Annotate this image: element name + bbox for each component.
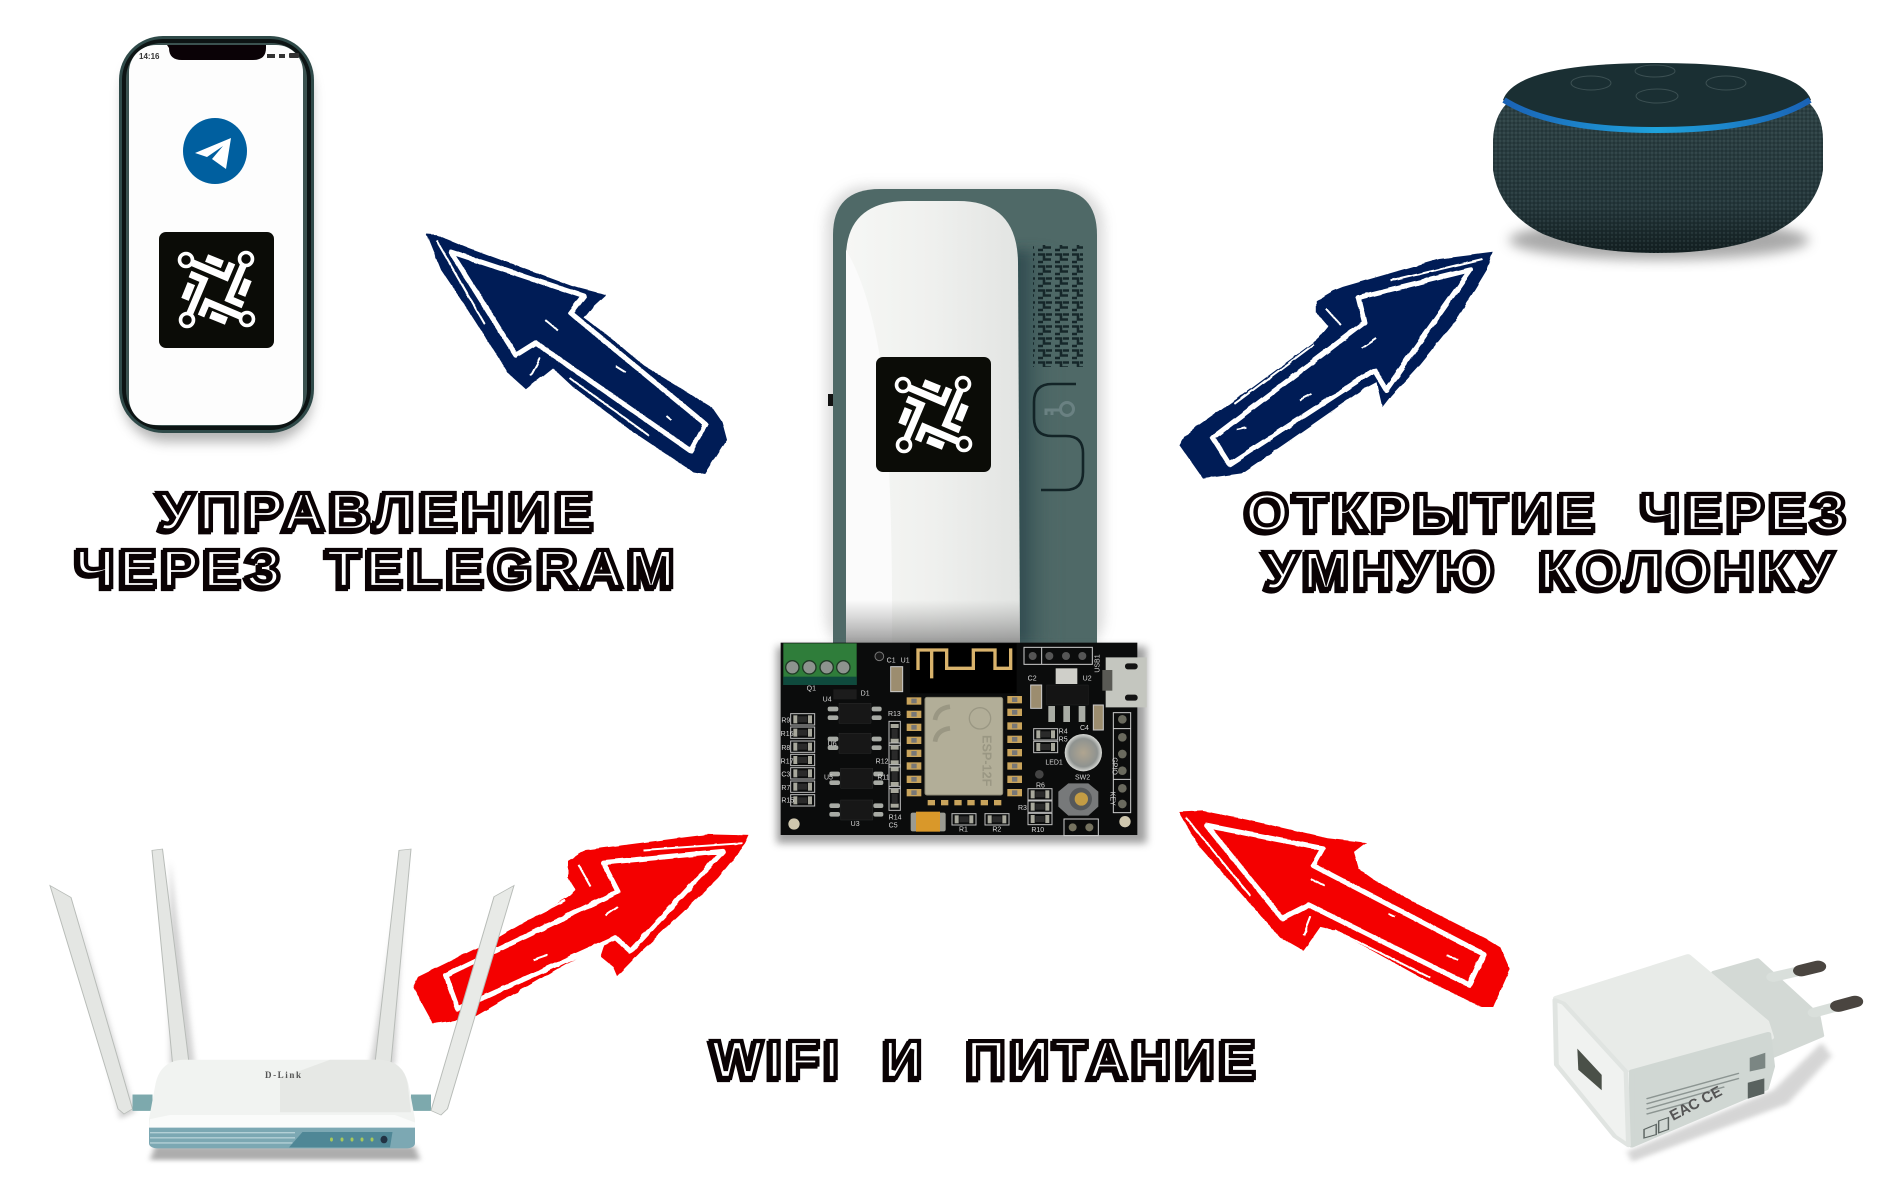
router brand label: D-Link — [265, 1070, 301, 1080]
USB header — [1024, 647, 1092, 664]
screw terminal — [783, 643, 857, 685]
ESP-12F module: ESP-12F — [980, 735, 994, 787]
speaker fabric body — [1493, 98, 1823, 253]
silkscreen labels: D1 — [861, 690, 870, 697]
GPIO header — [1113, 713, 1131, 813]
router base band — [149, 1128, 415, 1148]
voltage regulator — [1047, 668, 1088, 722]
silkscreen labels: U4 — [823, 697, 832, 704]
arrow: bottom-right red — [1179, 811, 1510, 1007]
silkscreen labels: R7 — [781, 785, 790, 792]
charger fine print — [1646, 1073, 1739, 1114]
silkscreen labels: SW2 — [1075, 774, 1090, 781]
capacitors — [891, 667, 1103, 730]
silkscreen labels: U5 — [824, 774, 833, 781]
antenna far right — [431, 885, 514, 1115]
intercom white receiver — [846, 201, 1020, 645]
phone app logo — [159, 232, 274, 348]
push button — [1058, 783, 1098, 816]
silkscreen labels: C5 — [889, 822, 898, 829]
charger side face — [1632, 1034, 1772, 1146]
speaker light ring — [1504, 100, 1810, 130]
antenna inner right — [375, 849, 411, 1063]
icon: key — [1046, 402, 1074, 416]
USB port — [1577, 1049, 1602, 1090]
silkscreen labels: C2 — [1028, 676, 1037, 683]
charger neck — [1714, 960, 1822, 1056]
router — [50, 849, 514, 1160]
tantalum capacitor — [911, 812, 946, 832]
speaker buttons — [1571, 65, 1746, 103]
silkscreen labels: GPIO — [1111, 757, 1118, 775]
silkscreen labels: R8 — [781, 745, 790, 752]
silkscreen labels: KEY — [1109, 792, 1116, 806]
charger certification marks: EAC CE — [1667, 1083, 1725, 1125]
silkscreen labels: R11 — [877, 774, 890, 781]
silkscreen labels: R3 — [1018, 805, 1027, 812]
heading: smart speaker opening — [1245, 483, 1851, 601]
router side connectors — [132, 1095, 431, 1111]
status LED — [1065, 734, 1102, 771]
QR code — [1748, 1078, 1764, 1099]
silkscreen labels: R16 — [781, 731, 794, 738]
silkscreen labels: U3 — [851, 821, 860, 828]
silkscreen labels: R6 — [1036, 783, 1045, 790]
silkscreen labels: U6 — [828, 741, 837, 748]
heading: smart speaker opening: УМНУЮ КОЛОНКУ — [1264, 541, 1838, 601]
arrow: top-left navy — [427, 234, 727, 474]
silkscreen labels: R9 — [781, 718, 790, 725]
antenna far left — [50, 885, 132, 1114]
board — [781, 643, 1137, 835]
silkscreen labels: R10 — [1031, 827, 1044, 834]
silkscreen labels: R1 — [959, 826, 968, 833]
charger top face — [1556, 957, 1771, 1070]
silkscreen labels: R5 — [1059, 736, 1068, 743]
charger front face — [1555, 1000, 1628, 1146]
router front panel — [289, 1132, 392, 1147]
antenna trace — [910, 643, 1017, 693]
phone status time: 14:16 — [139, 52, 160, 61]
phone notch — [167, 45, 266, 60]
resistor column middle — [889, 721, 900, 810]
intercom handset — [826, 186, 1104, 656]
heading: smart speaker opening: ОТКРЫТИЕ ЧЕРЕЗ — [1245, 483, 1851, 543]
silkscreen labels: R17 — [781, 758, 794, 765]
phone with Telegram app — [119, 36, 314, 442]
silkscreen labels: USB1 — [1094, 654, 1101, 673]
heading: wifi and power: WIFI И ПИТАНИЕ — [711, 1030, 1260, 1090]
silkscreen labels: LED1 — [1045, 760, 1063, 767]
silkscreen labels: R2 — [992, 826, 1001, 833]
heading: telegram control: ЧЕРЕЗ TELEGRAM — [75, 539, 679, 599]
phone status icons — [267, 53, 299, 58]
speaker top disc — [1503, 63, 1811, 130]
silkscreen labels: R4 — [1059, 728, 1068, 735]
ESP-12F module — [925, 697, 1003, 795]
Mi badge — [1750, 1053, 1765, 1072]
antenna inner left — [152, 849, 189, 1063]
call button outline — [1034, 384, 1083, 490]
bottom pads — [928, 800, 1001, 805]
intercom logo — [876, 357, 991, 472]
heading: telegram control — [75, 482, 679, 599]
PCB controller board — [777, 643, 1147, 843]
silkscreen labels — [781, 654, 1118, 834]
speaker grille — [1033, 245, 1083, 367]
charger pins — [1773, 966, 1855, 1013]
side switch — [828, 394, 833, 406]
silkscreen labels: C1 — [887, 658, 896, 665]
charger — [1555, 957, 1855, 1162]
silkscreen labels: Q1 — [807, 686, 816, 693]
micro USB connector — [1102, 657, 1147, 707]
ESP module pads — [907, 696, 1022, 796]
silkscreen labels: C4 — [1080, 725, 1089, 732]
silkscreen labels: R12 — [876, 758, 889, 765]
optocouplers — [828, 689, 883, 820]
router top shell — [149, 1060, 415, 1129]
silkscreen labels: R13 — [888, 711, 901, 718]
silkscreen labels: R14 — [889, 814, 902, 821]
speaker: smart speaker — [1493, 63, 1823, 260]
arrow: bottom-left red — [413, 834, 750, 1024]
intercom body — [833, 189, 1097, 645]
resistor column left — [791, 714, 815, 806]
heading: telegram control: УПРАВЛЕНИЕ — [158, 482, 598, 542]
silkscreen labels: U1 — [901, 658, 910, 665]
bottom header and mount holes — [788, 652, 1131, 836]
silkscreen labels: C3 — [781, 772, 790, 779]
silkscreen labels: U2 — [1083, 676, 1092, 683]
arrow: top-right navy — [1180, 252, 1493, 479]
resistors right and bottom — [952, 729, 1058, 825]
silkscreen labels: R15 — [781, 798, 794, 805]
icon: Telegram — [183, 118, 247, 184]
